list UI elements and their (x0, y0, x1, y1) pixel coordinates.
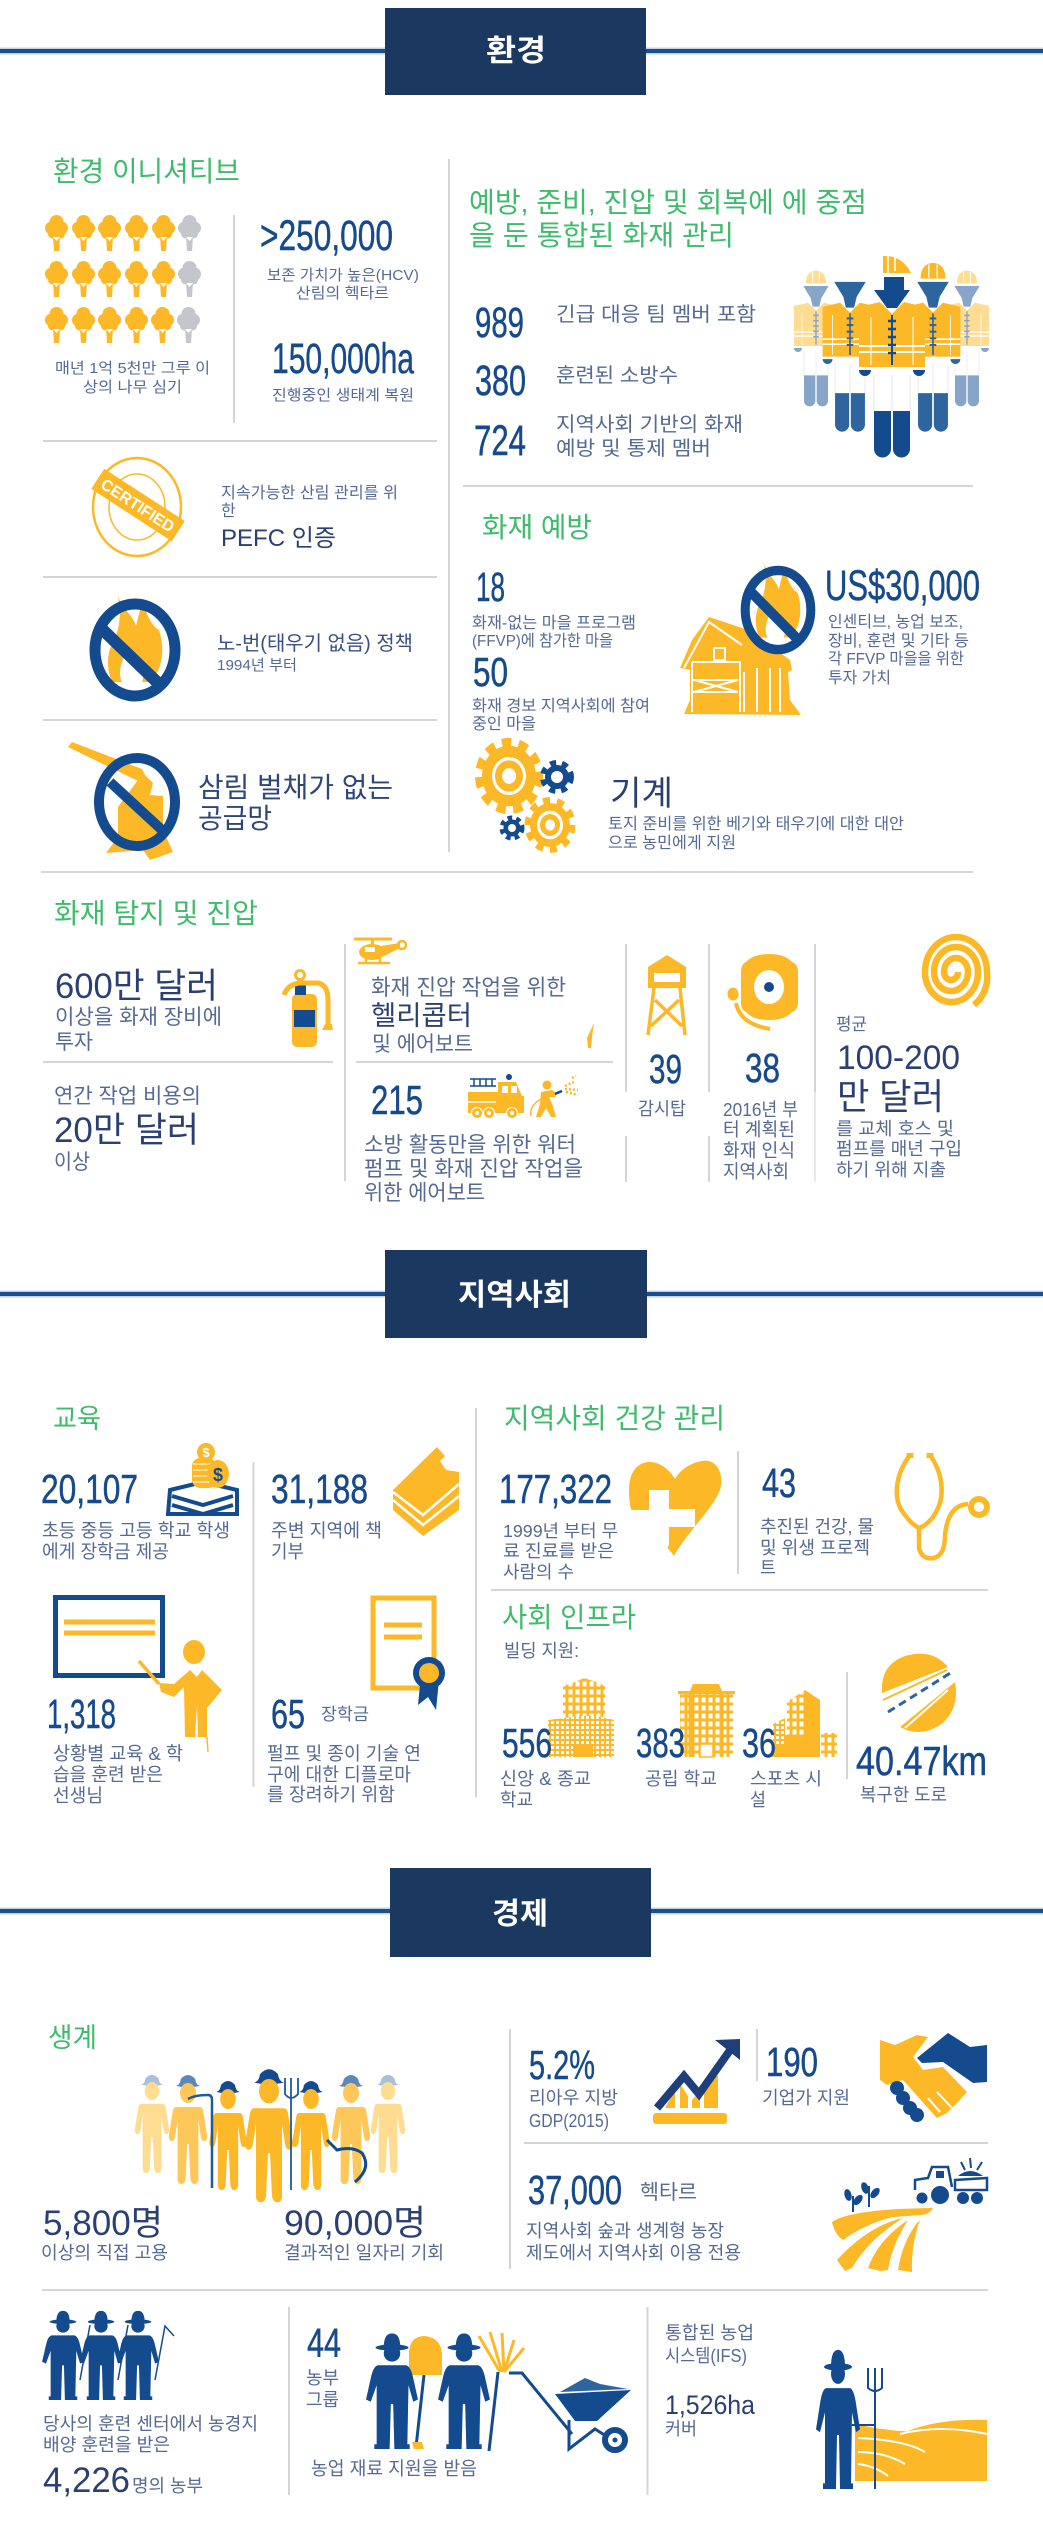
text: tree planting caption: 매년 1억 5천만 그루 이 (55, 360, 210, 377)
icon: stethoscope (897, 1453, 987, 1558)
stats: fire free villages: 화재 경보 지역사회에 참여 (472, 697, 650, 715)
stat: indirect job opportunities: 결과적인 일자리 기회 (284, 2242, 444, 2263)
icon: teacher at board (56, 1598, 222, 1752)
stat: hectares community forest: 37,000 (528, 2167, 622, 2213)
icon: three farmers (42, 2311, 174, 2400)
stat: 6 million dollars (55, 967, 222, 1054)
icon: flame sliver (587, 1023, 594, 1048)
icon: coins on books: $ (202, 1445, 210, 1460)
stat: scholarships students: 에게 장학금 제공 (42, 1541, 169, 1562)
stats: fire teams: 지역사회 기반의 화재 (556, 413, 743, 436)
stat: hose replacement spend: 100-200 (837, 1039, 960, 1077)
header: environment: 환경 (486, 35, 546, 68)
icon: alarm bell (728, 954, 798, 1029)
text: machinery (608, 775, 904, 852)
icon: no deforestation axe (68, 742, 175, 860)
stat: teachers trained: 상황별 교육 & 학 (53, 1743, 183, 1764)
stat: health water sanitation projects: 및 위생 프로젝 (760, 1537, 870, 1558)
text: trained farmers: 4,226 (43, 2461, 130, 2500)
stat: scholarships diploma: 65 (271, 1691, 305, 1737)
icon: farmer and fields (816, 2350, 987, 2489)
header: community (0, 1250, 1043, 1338)
stats: fire free villages: 중인 마을 (472, 715, 536, 733)
stat: annual operating cost (54, 1085, 201, 1174)
icon: building public schools (678, 1684, 735, 1757)
stat: fire awareness communities (723, 1045, 798, 1182)
text: deforestation-free supply chain: 삼림 벌채가 없는 (198, 772, 393, 803)
stat: entrepreneurs supported: 190 (766, 2039, 818, 2085)
heading: fire detection and suppression: 화재 탐지 및 진압 (54, 898, 258, 929)
text: machinery: 토지 준비를 위한 베기와 태우기에 대한 대안 (608, 815, 904, 833)
stat: annual operating cost: 이상 (54, 1151, 90, 1174)
text: building support: 빌딩 지원: (504, 1641, 579, 1661)
stat: fire awareness communities: 지역사회 (723, 1161, 789, 1182)
text: PEFC certification: 지속가능한 산림 관리를 위 (221, 484, 398, 502)
stat: direct employment: 이상의 직접 고용 (41, 2242, 168, 2263)
icon: fire extinguisher (284, 970, 333, 1047)
stats: fire free villages: (FFVP)에 참가한 마을 (472, 632, 613, 650)
stats: fire free villages: 18 (476, 564, 505, 610)
stat: hectares community forest: 지역사회 숲과 생계형 농장 (526, 2220, 724, 2241)
text: helicopters and airboats: 헬리콥터 (371, 1001, 472, 1031)
stat: repaired roads: 40.47km (856, 1738, 987, 1784)
heading: social infrastructure: 사회 인프라 (502, 1602, 636, 1633)
stat: investment per village: 투자 가치 (828, 669, 891, 687)
stat: investment per village: 인센티브, 농업 보조, (828, 613, 963, 631)
stats: fire teams: 긴급 대응 팀 멤버 포함 (556, 303, 756, 326)
stat: hose replacement spend: 하기 위해 지출 (836, 1159, 946, 1180)
stat: entrepreneurs supported (762, 2039, 850, 2108)
stat: HCV forest hectares: 산림의 헥타르 (296, 285, 389, 302)
stat: 6 million dollars: 이상을 화재 장비에 (55, 1006, 222, 1029)
stat: teachers trained (47, 1691, 183, 1806)
text: trained farmers: 당사의 훈련 센터에서 농경지 (43, 2413, 258, 2434)
text: PEFC certification: PEFC 인증 (221, 525, 336, 552)
text: integrated farming system: 통합된 농업 (665, 2323, 754, 2343)
stat: Riau GDP (529, 2042, 618, 2131)
stat: sports facilities: 36 (742, 1720, 776, 1766)
stat: teachers trained: 1,318 (47, 1691, 116, 1737)
icon: hose coil (925, 937, 987, 1005)
stat: farmer groups: 그룹 (306, 2390, 339, 2410)
icon: certified stamp (91, 458, 185, 556)
header: environment (0, 8, 1043, 95)
stats: fire free villages: 50 (473, 649, 508, 695)
stat: 215 water pumps: 위한 에어보트 (364, 1181, 485, 1205)
heading: integrated fire management (469, 187, 867, 251)
stat: investment per village: US$30,000 (825, 562, 980, 610)
stat: hose replacement spend: 만 달러 (837, 1076, 944, 1117)
stat: fire awareness communities: 2016년 부 (723, 1099, 798, 1120)
text: no-burn policy (217, 632, 413, 674)
text: helicopters and airboats (371, 975, 566, 1056)
icon: coins on books (168, 1443, 237, 1514)
stat: free medical treatment: 료 진료를 받은 (503, 1541, 614, 1561)
text: integrated farming system (665, 2323, 756, 2439)
stat: books donated: 31,188 (271, 1466, 368, 1512)
stat: scholarships diploma: 구에 대한 디플로마 (267, 1764, 411, 1785)
stat: hose replacement spend: 펌프를 매년 구입 (836, 1138, 962, 1159)
text: no-burn policy: 노-번(태우기 없음) 정책 (217, 632, 413, 655)
stat: scholarships diploma: 펄프 및 종이 기술 연 (267, 1743, 421, 1764)
section: environment (0, 8, 1043, 1205)
stat: farmer groups: 농부 (306, 2368, 339, 2388)
text: machinery: 으로 농민에게 지원 (608, 834, 736, 852)
stat: 6 million dollars: 투자 (55, 1031, 93, 1054)
stat: watch towers: 감시탑 (638, 1099, 686, 1119)
stats: fire teams: 훈련된 소방수 (556, 364, 678, 387)
stats: fire teams: 724 (474, 417, 526, 465)
stat: Riau GDP: 리아우 지방 (529, 2087, 618, 2108)
stat: watch towers (638, 1046, 686, 1119)
icon: building religious schools (548, 1678, 614, 1757)
text: PEFC certification (221, 484, 398, 552)
stat: fire awareness communities: 38 (745, 1045, 780, 1091)
stats: fire free villages: 화재-없는 마을 프로그램 (472, 614, 636, 632)
stat: sports facilities: 설 (750, 1790, 766, 1810)
heading: fire prevention: 화재 예방 (482, 512, 592, 543)
stat: direct employment (41, 2204, 168, 2263)
stat: entrepreneurs supported: 기업가 지원 (762, 2087, 850, 2108)
stat: ecosystem restoration: 150,000ha (272, 335, 414, 383)
icon: fire truck (468, 1074, 524, 1118)
stat: direct employment: 5,800명 (43, 2204, 163, 2243)
stat: religious schools: 556 (502, 1720, 552, 1766)
icon: gears (480, 744, 572, 849)
text: helicopters and airboats: 및 에어보트 (372, 1033, 473, 1056)
icon: wheelbarrow (509, 2373, 631, 2450)
header: community: 지역사회 (458, 1279, 571, 1312)
stat: farmer groups: 44 (307, 2320, 341, 2366)
stat: 6 million dollars: 600만 달러 (55, 967, 218, 1006)
heading: community healthcare: 지역사회 건강 관리 (504, 1403, 725, 1434)
stat: scholarships diploma: 장학금 (321, 1705, 369, 1724)
stat: fire awareness communities: 터 계획된 (723, 1119, 795, 1140)
stat: religious schools: 학교 (500, 1790, 533, 1810)
stat: 215 water pumps: 소방 활동만을 위한 워터 (364, 1133, 576, 1157)
icon: building sports facilities (772, 1690, 837, 1757)
heading: environmental initiatives: 환경 이니셔티브 (53, 156, 240, 187)
text: machinery: 기계 (610, 775, 673, 813)
icon: handshake (880, 2033, 987, 2122)
text: trained farmers: 배양 훈련을 받은 (43, 2434, 170, 2455)
stat: books donated (271, 1466, 382, 1562)
section: community (0, 1250, 1043, 1810)
stat: investment per village (825, 562, 980, 687)
text: deforestation-free supply chain: 공급망 (198, 803, 272, 834)
stat: ecosystem restoration (272, 335, 414, 404)
stat: free medical treatment (499, 1466, 618, 1582)
icon: heart with cross (625, 1461, 721, 1560)
stats: fire teams: 380 (475, 357, 526, 405)
text: PEFC certification: 한 (221, 502, 236, 520)
heading: integrated fire management: 예방, 준비, 진압 및 회복에 에 중점 (469, 187, 867, 218)
stat: free medical treatment: 1999년 부터 무 (503, 1521, 618, 1541)
icon: two farmers with tools (366, 2332, 524, 2451)
header: economy (0, 1868, 1043, 1957)
stat: free medical treatment: 177,322 (499, 1466, 612, 1512)
icon: no burn (95, 593, 175, 696)
stat: 215 water pumps (364, 1077, 583, 1205)
icon: group of workers (135, 2069, 405, 2202)
stat: religious schools: 신앙 & 종교 (500, 1769, 591, 1789)
stat: Riau GDP: 5.2% (529, 2042, 595, 2088)
stat: teachers trained: 선생님 (53, 1785, 103, 1806)
icon: road (882, 1654, 956, 1732)
stat: indirect job opportunities: 90,000명 (284, 2204, 426, 2243)
stat: repaired roads: 복구한 도로 (860, 1785, 947, 1805)
icon: farm field and tractor (832, 2158, 987, 2272)
stat: hose replacement spend: 평균 (836, 1015, 867, 1034)
stat: religious schools (500, 1720, 591, 1810)
stat: public schools (636, 1720, 717, 1789)
heading: integrated fire management: 을 둔 통합된 화재 관리 (469, 220, 734, 251)
stat: HCV forest hectares: 보존 가치가 높은(HCV) (267, 267, 419, 284)
stat: HCV forest hectares (260, 212, 419, 302)
icon: coins on books: $ (213, 1465, 223, 1485)
stat: watch towers: 39 (649, 1046, 682, 1092)
stat: investment per village: 각 FFVP 마을을 위한 (828, 650, 964, 668)
icon: firefighter spraying (531, 1076, 578, 1117)
stat: hectares community forest (526, 2167, 741, 2263)
text: integrated farming system: 시스템(IFS) (665, 2346, 747, 2366)
stat: teachers trained: 습을 훈련 받은 (53, 1764, 163, 1785)
section: economy (0, 1868, 1043, 2500)
stat: scholarships diploma (267, 1691, 421, 1805)
stat: health water sanitation projects: 추진된 건강, 물 (760, 1516, 874, 1537)
icon: tree grid (45, 215, 201, 343)
stat: sports facilities: 스포츠 시 (750, 1769, 822, 1789)
stat: indirect job opportunities (284, 2204, 444, 2263)
stat: health water sanitation projects: 43 (762, 1460, 796, 1506)
stat: scholarships diploma: 를 장려하기 위함 (267, 1784, 395, 1805)
text: tree planting caption: 상의 나무 심기 (83, 379, 182, 396)
stat: 215 water pumps: 215 (371, 1077, 423, 1123)
text: trained farmers: 명의 농부 (132, 2476, 203, 2496)
text: trained farmers (43, 2413, 258, 2500)
stat: ecosystem restoration: 진행중인 생태계 복원 (272, 387, 414, 404)
stats: fire teams: 989 (475, 299, 524, 347)
stat: 215 water pumps: 펌프 및 화재 진압 작업을 (364, 1157, 583, 1181)
stat: public schools: 383 (636, 1720, 685, 1766)
stats: fire teams (474, 299, 756, 465)
stat: free medical treatment: 사람의 수 (503, 1562, 574, 1582)
heading: education: 교육 (53, 1404, 101, 1434)
stat: scholarships students: 20,107 (41, 1466, 138, 1512)
icon: firefighters group (794, 255, 989, 458)
stat: books donated: 주변 지역에 책 (271, 1520, 382, 1541)
stat: fire awareness communities: 화재 인식 (723, 1140, 795, 1161)
stat: hose replacement spend (836, 1015, 962, 1180)
stat: scholarships students: 초등 중등 고등 학교 학생 (42, 1520, 230, 1541)
text: integrated farming system: 1,526ha (665, 2390, 756, 2420)
header: economy: 경제 (492, 1898, 548, 1931)
stat: hose replacement spend: 를 교체 호스 및 (836, 1118, 954, 1139)
icon: helicopter (354, 939, 406, 963)
icon: diploma with ribbon (373, 1598, 445, 1710)
icon: certified stamp: CERTIFIED (97, 476, 177, 536)
stat: repaired roads (856, 1738, 987, 1805)
stat: annual operating cost: 연간 작업 비용의 (54, 1085, 201, 1108)
stat: hectares community forest: 제도에서 지역사회 이용 전용 (526, 2242, 741, 2263)
icon: book stack (393, 1447, 459, 1536)
stat: public schools: 공립 학교 (645, 1769, 717, 1789)
text: farm materials support: 농업 재료 지원을 받음 (311, 2458, 477, 2479)
text: integrated farming system: 커버 (665, 2419, 697, 2439)
icon: growth chart (653, 2039, 740, 2124)
stat: investment per village: 장비, 훈련 및 기타 등 (828, 632, 969, 650)
stat: HCV forest hectares: >250,000 (260, 212, 393, 260)
text: deforestation-free supply chain (198, 772, 393, 834)
icon: watch tower (648, 955, 686, 1035)
icon: barn with no fire sign (680, 561, 811, 715)
stat: health water sanitation projects: 트 (760, 1557, 776, 1578)
stat: health water sanitation projects (760, 1460, 874, 1578)
text: helicopters and airboats: 화재 진압 작업을 위한 (371, 975, 566, 1000)
stat: annual operating cost: 20만 달러 (54, 1111, 199, 1150)
stats: fire teams: 예방 및 통제 멤버 (556, 437, 711, 460)
stat: sports facilities (742, 1720, 822, 1810)
stat: books donated: 기부 (271, 1541, 304, 1562)
stat: scholarships students (41, 1466, 230, 1562)
text: no-burn policy: 1994년 부터 (217, 657, 297, 674)
heading: livelihoods: 생계 (48, 2023, 97, 2053)
text: tree planting caption (55, 360, 210, 396)
stat: farmer groups (306, 2320, 341, 2410)
stats: fire free villages (472, 564, 650, 733)
stat: Riau GDP: GDP(2015) (529, 2110, 609, 2131)
stat: hectares community forest: 헥타르 (640, 2181, 697, 2204)
